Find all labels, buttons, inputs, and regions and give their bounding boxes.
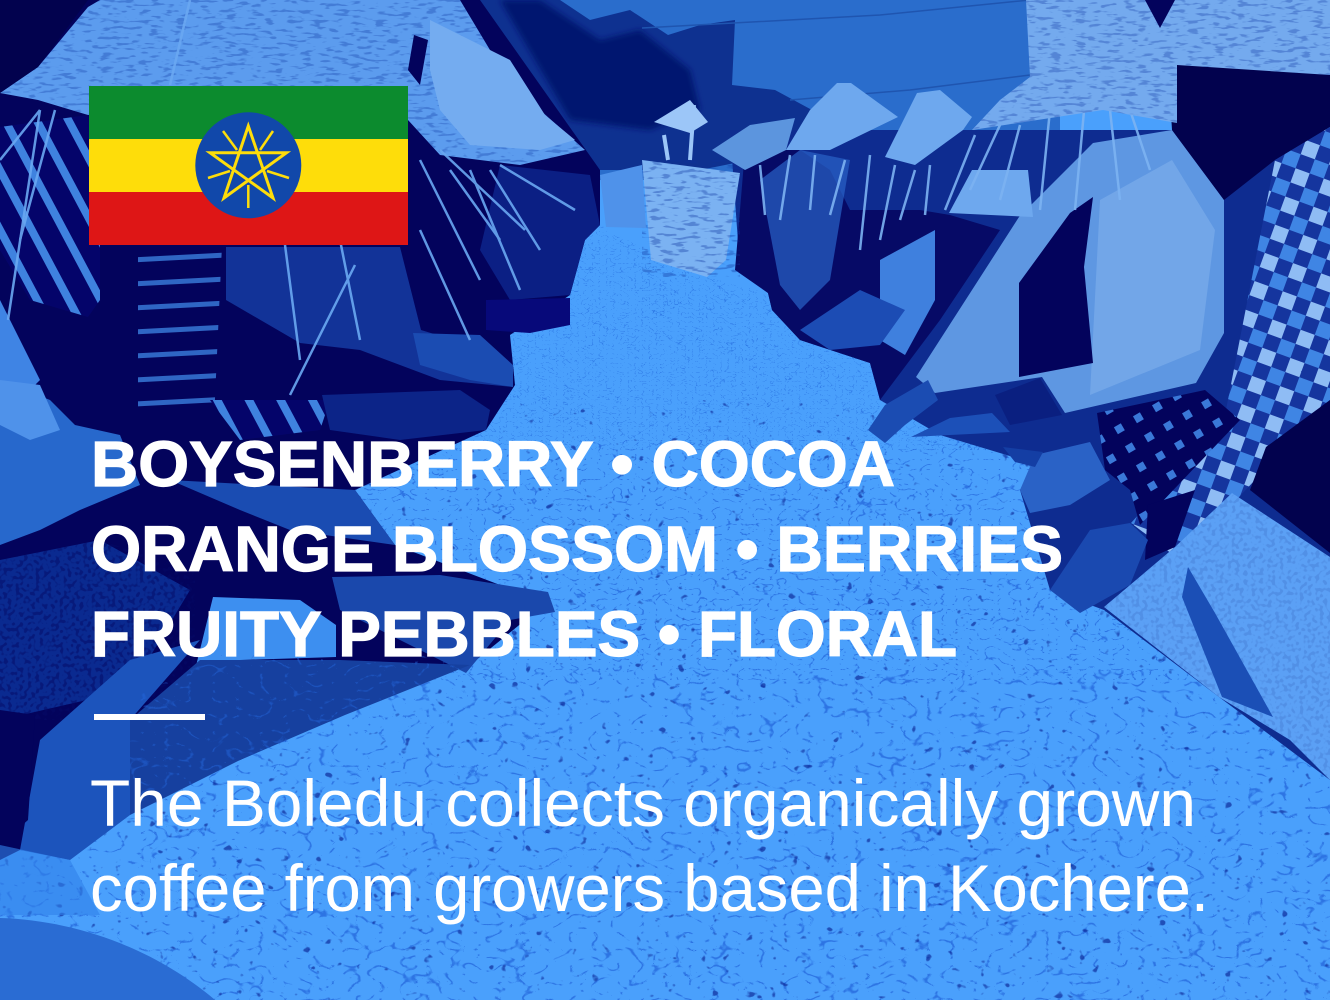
middle sack under text <box>170 480 395 545</box>
beans base <box>0 226 1330 1000</box>
description text: coffee from growers based in Kochere. <box>90 851 1209 925</box>
dark bean patches right <box>911 413 1010 437</box>
flag of Ethiopia <box>89 86 408 245</box>
hand over beans <box>332 575 555 673</box>
description text: The Boledu collects organically grown <box>90 766 1196 840</box>
sweater lower left <box>0 540 190 720</box>
large hat left <box>0 0 585 165</box>
sky and treeline <box>470 0 1060 180</box>
workers on the right <box>654 63 1330 785</box>
striped shirt <box>0 115 100 317</box>
darker beans patch <box>130 660 470 815</box>
left bright cloth <box>0 300 40 420</box>
heading: tasting notes: FRUITY PEBBLES • FLORAL <box>91 598 957 670</box>
bottom-left blurred shape <box>0 918 215 1000</box>
right worker face shadow <box>1168 63 1330 200</box>
heading: tasting notes <box>91 428 1063 670</box>
flag emblem: blue disc with star <box>195 112 301 218</box>
straw fringe left <box>0 0 575 395</box>
middle workers <box>735 150 1000 400</box>
heading: tasting notes: BOYSENBERRY • COCOA <box>91 428 895 500</box>
cloth sack <box>1104 493 1330 780</box>
heading: tasting notes: ORANGE BLOSSOM • BERRIES <box>91 513 1063 585</box>
lit beans gap left <box>195 597 336 670</box>
basket <box>600 105 740 277</box>
straw fringe right <box>760 100 1150 250</box>
hands on right <box>868 380 938 443</box>
checked shirt <box>1131 127 1330 560</box>
description text <box>90 766 1209 925</box>
workers on the left <box>0 0 600 1000</box>
small hats <box>786 83 898 150</box>
divider rule <box>94 714 205 720</box>
far left shirts and arms <box>480 165 600 300</box>
big hats on the right <box>960 0 1330 135</box>
right worker jacket <box>916 130 1224 413</box>
